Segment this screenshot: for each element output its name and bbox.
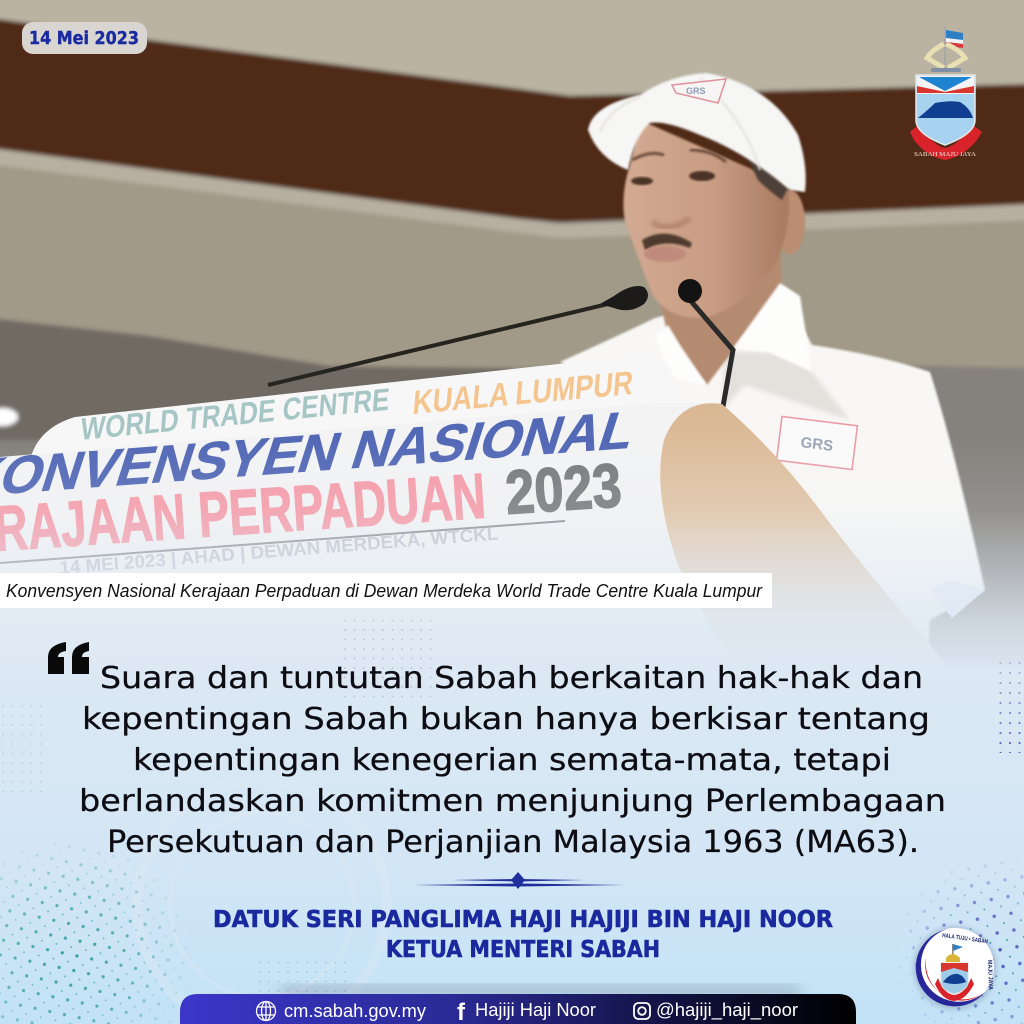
blue swoosh bbox=[916, 929, 985, 1006]
microphones bbox=[268, 279, 733, 412]
ear bbox=[775, 190, 805, 254]
quote text bbox=[79, 661, 946, 860]
cap crease bbox=[600, 78, 760, 170]
tan podium side bbox=[660, 403, 970, 690]
crest arms bbox=[927, 44, 965, 68]
quote text: kepentingan Sabah bukan hanya berkisar tentang bbox=[82, 702, 930, 737]
faint watermark rings bbox=[137, 780, 387, 1024]
chest badge GRS bbox=[777, 417, 857, 469]
collar bbox=[655, 283, 812, 385]
decorative dots: grid lower centre bbox=[256, 958, 352, 994]
facebook name: Hajiji Haji Noor bbox=[475, 1000, 596, 1020]
small ribbon bbox=[935, 978, 974, 1001]
eyebrows and eyes bbox=[632, 150, 726, 162]
photo caption bar bbox=[0, 573, 772, 608]
quote text: berlandaskan komitmen menjunjung Perlembagaan bbox=[79, 784, 946, 819]
ring text: HALA TUJU • SABAH bbox=[942, 933, 988, 945]
icon: Hala Tuju Sabah Maju Jaya badge bbox=[913, 926, 997, 1010]
instagram handle: @hajiji_haji_noor bbox=[656, 1000, 798, 1021]
mountain bbox=[918, 101, 973, 118]
icon: Sabah coat of arms bbox=[910, 26, 982, 160]
small crest bbox=[952, 944, 954, 960]
icon: opening quotation mark bbox=[48, 642, 89, 674]
decorative dots: teal, lower left bbox=[0, 841, 189, 1024]
mustache and mouth bbox=[642, 234, 692, 250]
hair at temple bbox=[745, 152, 788, 200]
cap badge bbox=[672, 79, 726, 103]
ribbon bbox=[910, 126, 982, 160]
podium with convention banner bbox=[0, 355, 970, 690]
banner: year: 2023 bbox=[503, 451, 624, 528]
nose shadow bbox=[652, 218, 690, 227]
decorative dots: grid upper centre bbox=[340, 620, 436, 702]
banner: event details: 14 MEI 2023 | AHAD | DEWAN MERDEKA, WTCKL bbox=[59, 524, 499, 578]
lower white sheet bbox=[0, 403, 722, 690]
chest badge GRS: GRS bbox=[800, 434, 834, 455]
cap bbox=[588, 73, 806, 192]
shirt shadow folds bbox=[722, 352, 850, 420]
red swoosh bbox=[925, 958, 982, 1001]
quote text: kepentingan kenegerian semata-mata, tetapi bbox=[133, 743, 891, 778]
sleeve fold bbox=[930, 580, 985, 618]
cap badge: GRS bbox=[686, 86, 706, 96]
attribution: name and title: KETUA MENTERI SABAH bbox=[386, 937, 660, 963]
banner: venue name: WORLD TRADE CENTRE bbox=[79, 382, 391, 447]
photo: speaker in white cap and shirt bbox=[560, 73, 985, 720]
decorative dots: purple grid right bbox=[992, 662, 1021, 753]
footer bar shadow bbox=[280, 986, 800, 996]
date pill: 14 Mei 2023 bbox=[29, 29, 139, 49]
decorative dots: grid left bbox=[0, 700, 46, 796]
icon: instagram bbox=[634, 1003, 650, 1019]
icon: globe bbox=[256, 1002, 276, 1020]
right microphone bbox=[690, 300, 733, 412]
ornamental divider bbox=[414, 872, 624, 889]
neck bbox=[660, 245, 782, 385]
face bbox=[623, 120, 789, 318]
flag bbox=[944, 26, 963, 68]
attribution: name and title bbox=[213, 907, 833, 963]
crest beads bbox=[931, 68, 961, 72]
footer social bar bbox=[180, 994, 856, 1024]
motto: SABAH MAJU JAYA bbox=[914, 152, 977, 158]
quote text: Suara dan tuntutan Sabah berkaitan hak-hak dan bbox=[100, 661, 923, 696]
website: cm.sabah.gov.my bbox=[284, 1001, 426, 1021]
shirt bbox=[560, 285, 985, 720]
photo caption bar: Konvensyen Nasional Kerajaan Perpaduan di Dewan Merdeka World Trade Centre Kuala Lumpur bbox=[6, 581, 763, 601]
banner: rule bbox=[0, 521, 565, 563]
date pill bbox=[22, 22, 147, 54]
icon: Hala Tuju Sabah Maju Jaya badge: MAJU JAYA bbox=[986, 960, 993, 991]
fade from photo to light blue panel bbox=[0, 440, 1024, 670]
left microphone bbox=[268, 303, 612, 385]
quote text: Persekutuan dan Perjanjian Malaysia 1963 (MA63). bbox=[107, 825, 919, 860]
shield bbox=[916, 75, 975, 145]
banner: city name: KUALA LUMPUR bbox=[411, 365, 635, 422]
small shield bbox=[941, 963, 968, 994]
decorative dots: blue, lower right bbox=[900, 862, 1024, 1024]
banner: pink headline: RAJAAN PERPADUAN bbox=[0, 460, 488, 565]
photo background: hall wall bbox=[0, 0, 1024, 690]
upper white band bbox=[30, 355, 680, 470]
lower light blue panel bbox=[0, 668, 1024, 1024]
attribution: name and title: DATUK SERI PANGLIMA HAJI HAJIJI BIN HAJI NOOR bbox=[213, 907, 833, 933]
